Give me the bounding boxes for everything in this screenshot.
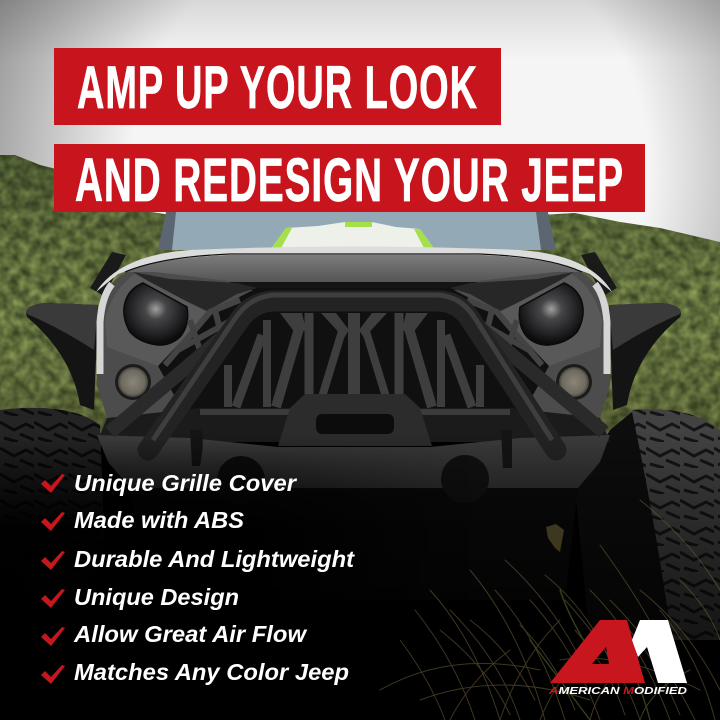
- item: Made with ABS: Made with ABS: [74, 507, 245, 533]
- item: Unique Grille Cover: Unique Grille Cover: [74, 470, 297, 496]
- grille centre tooth: [348, 313, 360, 397]
- under-chassis highlight: [546, 524, 564, 552]
- item: Unique Design: Unique Design: [74, 584, 239, 610]
- grille teeth left: [228, 313, 349, 407]
- white hood edge and side strips: [96, 246, 612, 292]
- grille teeth right: [359, 313, 480, 407]
- item: Allow Great Air Flow: Allow Great Air Flow: [73, 621, 308, 647]
- feature list: [41, 470, 355, 685]
- grille opening: [158, 288, 549, 415]
- grass in bottom right: [380, 500, 720, 720]
- fender flares: [26, 303, 98, 410]
- windshield: [158, 212, 556, 250]
- tires: [0, 408, 105, 610]
- hood: [125, 255, 582, 282]
- item: Durable And Lightweight: Durable And Lightweight: [74, 546, 355, 572]
- heading line 1: [54, 48, 501, 125]
- logo: American Modified: AMERICAN M ODIFIED: [548, 686, 687, 697]
- logo: American Modified: [548, 620, 687, 697]
- jeep front illustration: [0, 212, 720, 640]
- hinges: [90, 252, 126, 296]
- tube bar: rear legs: [110, 328, 233, 432]
- bumper: [97, 435, 610, 488]
- lower dark band: [97, 408, 610, 442]
- tube bar: main hoop: [148, 301, 556, 450]
- item: Matches Any Color Jeep: Matches Any Color Jeep: [74, 659, 349, 685]
- body: [97, 260, 610, 418]
- winch plate: [278, 394, 432, 446]
- heading line 1: AMP UP YOUR LOOK: [77, 54, 478, 121]
- dark fade at bottom: [0, 447, 720, 640]
- left face: headlight, brow, lattice, fog light: [105, 272, 257, 400]
- photo background: sky and hills: [0, 0, 720, 440]
- right face: [450, 272, 602, 400]
